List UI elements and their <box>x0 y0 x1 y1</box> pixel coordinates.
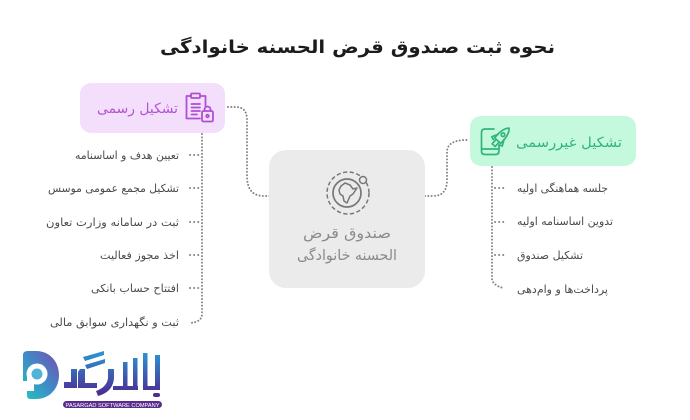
label: central fund: صندوق قرض <box>303 226 391 242</box>
list: informal steps: تدوین اساسنامه اولیه <box>517 215 613 228</box>
list: formal steps: تعیین هدف و اساسنامه <box>75 149 179 162</box>
list: formal steps <box>46 149 179 330</box>
label: informal: تشکیل غیررسمی <box>516 135 622 151</box>
panel: formal <box>80 83 225 133</box>
icon: globe <box>327 172 369 214</box>
icon: clipboard with lock <box>186 94 213 122</box>
panel: central fund <box>269 150 425 288</box>
list: formal steps: ثبت در سامانه وزارت تعاون <box>46 216 179 229</box>
list: formal steps: افتتاح حساب بانکی <box>91 282 179 295</box>
list: informal steps: تشکیل صندوق <box>517 249 583 262</box>
connector: formal steps <box>190 134 202 323</box>
list: formal steps: ثبت و نگهداری سوابق مالی <box>50 316 179 330</box>
list: informal steps <box>517 182 613 296</box>
logo tagline <box>63 401 162 409</box>
list: informal steps: پرداخت‌ها و وام‌دهی <box>517 283 608 296</box>
title: نحوه ثبت صندوق قرض الحسنه خانوادگی <box>160 36 555 58</box>
label: central fund: الحسنه خانوادگی <box>297 247 397 264</box>
connector: informal steps <box>492 167 504 288</box>
logo: Pasargad <box>20 351 162 409</box>
label: formal: تشکیل رسمی <box>97 101 178 117</box>
logo tagline: PASARGAD SOFTWARE COMPANY <box>66 403 160 409</box>
label: central fund <box>297 226 397 264</box>
connector: center to informal <box>425 140 467 196</box>
list: formal steps: اخذ مجوز فعالیت <box>100 249 179 262</box>
panel: informal <box>470 116 636 166</box>
list: informal steps: جلسه هماهنگی اولیه <box>517 182 608 195</box>
logo mark <box>20 351 59 401</box>
icon: phone with rocket <box>482 123 514 154</box>
list: formal steps: تشکیل مجمع عمومی موسس <box>48 182 179 195</box>
logo wordmark <box>64 351 160 397</box>
connector: center to formal <box>228 107 270 196</box>
